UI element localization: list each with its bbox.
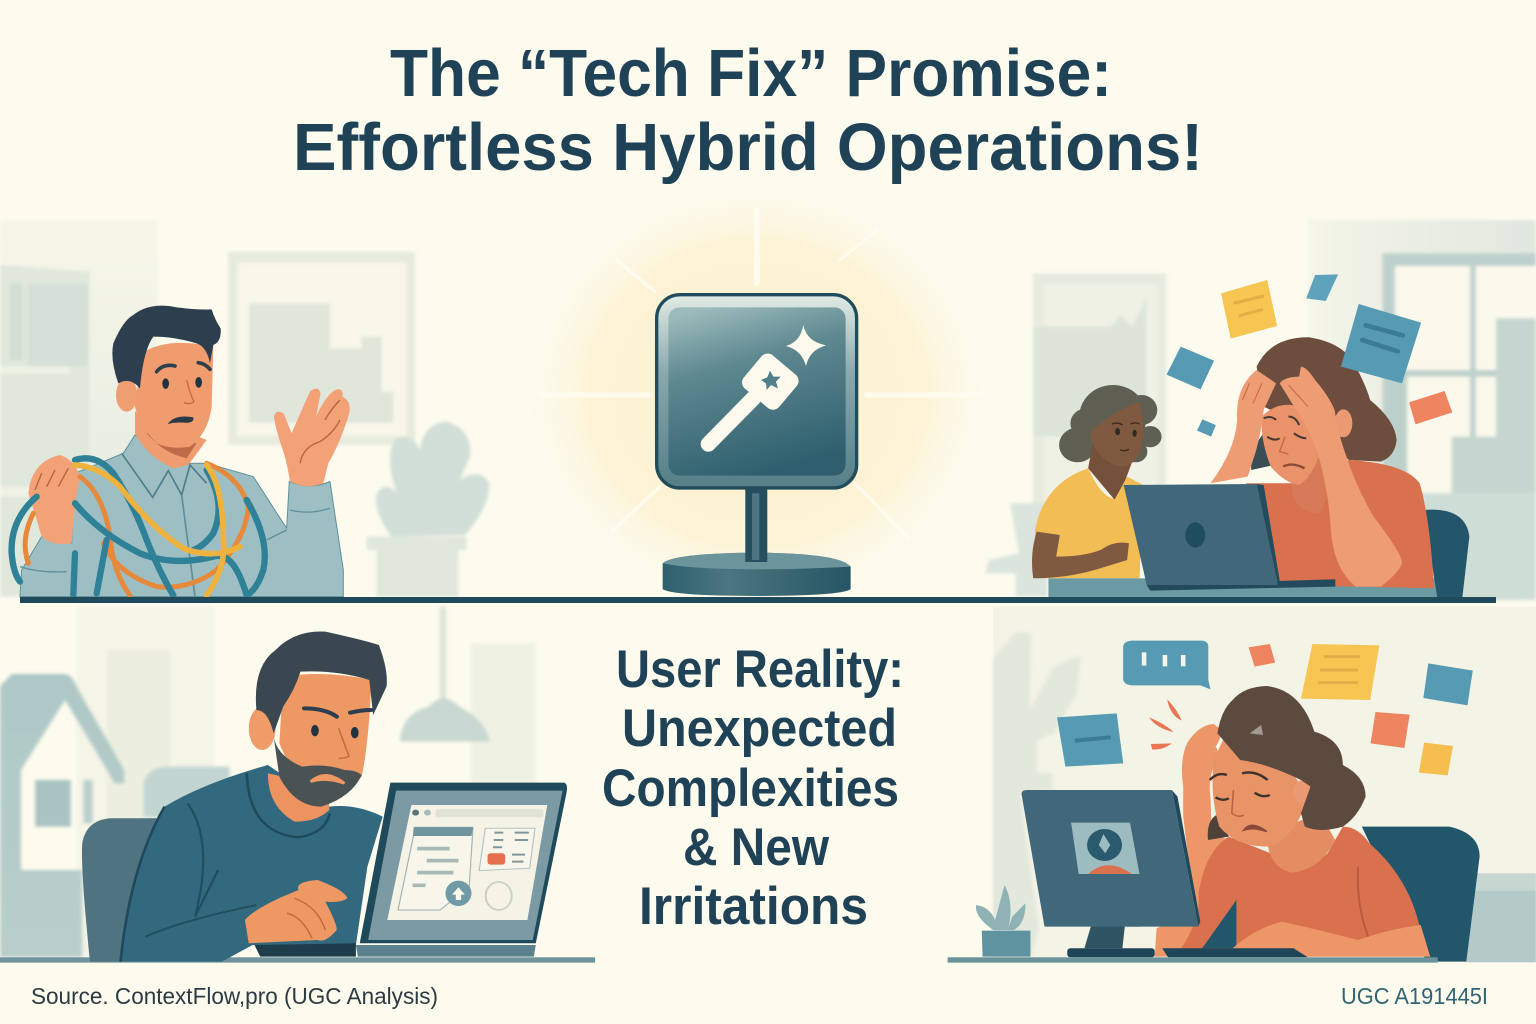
shirt xyxy=(20,435,343,597)
subheading: user reality: Complexities xyxy=(602,759,899,818)
chair xyxy=(1362,827,1480,962)
torso xyxy=(1176,827,1430,957)
hand xyxy=(245,880,347,943)
laptop with dashboard xyxy=(254,783,567,957)
potted plant xyxy=(976,885,1030,957)
large note xyxy=(1341,304,1421,383)
subheading: user reality: & New xyxy=(683,818,830,877)
source note: Source. ContextFlow,pro (UGC Analysis) xyxy=(31,983,438,1009)
title xyxy=(293,36,1203,185)
reference code: UGC A191445I xyxy=(1341,983,1488,1009)
screen with wand icon xyxy=(657,295,857,488)
neck xyxy=(135,412,207,468)
subheading: user reality xyxy=(602,640,904,936)
laptop xyxy=(1124,484,1335,591)
chair xyxy=(1423,510,1469,598)
faded home background xyxy=(0,607,536,957)
title: Effortless Hybrid Operations! xyxy=(293,110,1203,185)
faded room background xyxy=(0,220,489,597)
forearm on keyboard xyxy=(1233,922,1430,957)
right arm and hand xyxy=(1280,367,1402,587)
person: background coworker xyxy=(1032,385,1162,578)
panel: stressed coworkers with laptop xyxy=(985,220,1536,600)
person: stressed woman xyxy=(1210,337,1434,588)
glow xyxy=(517,177,997,610)
faded room background xyxy=(985,220,1536,600)
panel: woman with headache at monitor xyxy=(948,607,1536,963)
keyboard and desk xyxy=(948,948,1438,963)
panel: bearded man at laptop xyxy=(0,607,595,963)
subheading: user reality: Unexpected xyxy=(622,699,897,758)
raised hand xyxy=(274,389,350,486)
stand xyxy=(663,487,851,596)
head xyxy=(247,632,387,837)
head xyxy=(1208,686,1366,873)
light rays xyxy=(540,210,980,538)
title: The “Tech Fix” Promise: xyxy=(390,36,1112,111)
desk xyxy=(1048,578,1440,598)
faded room background xyxy=(993,607,1536,962)
floating notes xyxy=(1167,274,1452,437)
left arm and hand xyxy=(1210,370,1276,483)
face and hair xyxy=(112,306,221,448)
arm and hand on head xyxy=(1155,724,1229,957)
panel: man tangled in cables xyxy=(0,220,489,597)
divider line xyxy=(20,597,1496,603)
subheading: user reality: Irritations xyxy=(639,877,868,936)
chair xyxy=(82,818,161,962)
holding hand xyxy=(28,455,80,544)
floating notes xyxy=(1057,641,1473,775)
fingers over cables xyxy=(35,468,68,490)
subheading: user reality: User Reality: xyxy=(616,640,904,699)
cables xyxy=(12,458,265,595)
sweater xyxy=(121,765,383,962)
desk xyxy=(0,957,595,963)
panel: tech fix device xyxy=(517,177,997,610)
monitor xyxy=(1022,790,1200,948)
